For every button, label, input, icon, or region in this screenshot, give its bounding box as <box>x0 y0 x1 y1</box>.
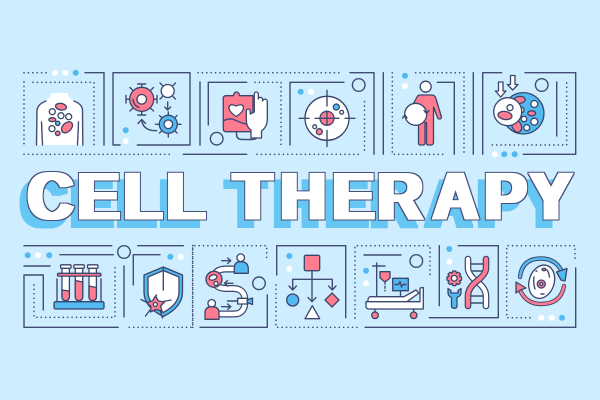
title <box>28 158 572 234</box>
icon: pink square <box>304 255 320 271</box>
icon: pink cell star <box>141 295 171 318</box>
panel: test tubes <box>24 246 183 327</box>
panel: hospital bed <box>355 246 576 327</box>
panel: shield <box>129 245 193 327</box>
title: THERAPY <box>234 158 572 234</box>
icon: pink diamond <box>325 293 339 307</box>
panel: person with rotating cell <box>392 73 473 154</box>
panel: body with cells <box>24 70 173 154</box>
icon: cell dish <box>494 76 544 134</box>
icon: person <box>402 81 442 145</box>
icon: pink cell <box>126 84 157 115</box>
icon: pink person <box>205 300 219 319</box>
icon: torso with cells <box>36 93 84 145</box>
icon: winding path <box>214 269 245 314</box>
icon: white triangle <box>305 306 320 319</box>
icon: blood bag <box>223 92 258 140</box>
icon: cell cycle <box>516 258 567 304</box>
icon: crosshair target <box>299 90 355 146</box>
panel: DNA and tools <box>429 246 498 318</box>
title: CELL <box>28 158 205 234</box>
icon: syringe <box>228 298 252 304</box>
panel: target <box>290 73 383 154</box>
icon: hand <box>246 92 267 138</box>
panel: cell mixture <box>483 73 576 157</box>
icon: blue circle <box>287 294 299 306</box>
panel: cell modification <box>113 73 190 145</box>
icon: white cell <box>160 83 176 99</box>
icon: pink cell <box>206 271 222 287</box>
icon: blue person <box>234 254 248 273</box>
icon: bed <box>366 263 423 319</box>
panel: flowchart <box>276 246 358 327</box>
arrows: pathway directions <box>222 258 233 309</box>
icon: blue cell <box>156 112 181 137</box>
icon: DNA helix <box>468 259 486 306</box>
arrow: white to blue cell <box>165 102 171 110</box>
icon: shield <box>144 267 182 316</box>
panel: blood bag and hand <box>183 73 364 154</box>
icon: wrench <box>448 288 461 308</box>
flowchart connectors <box>289 271 336 302</box>
icon: gear <box>447 271 462 286</box>
panel: patient pathway <box>193 246 267 327</box>
arrow: curved return <box>138 120 157 131</box>
icon: test tube rack <box>54 265 104 309</box>
panel: cell cycle <box>507 246 575 321</box>
